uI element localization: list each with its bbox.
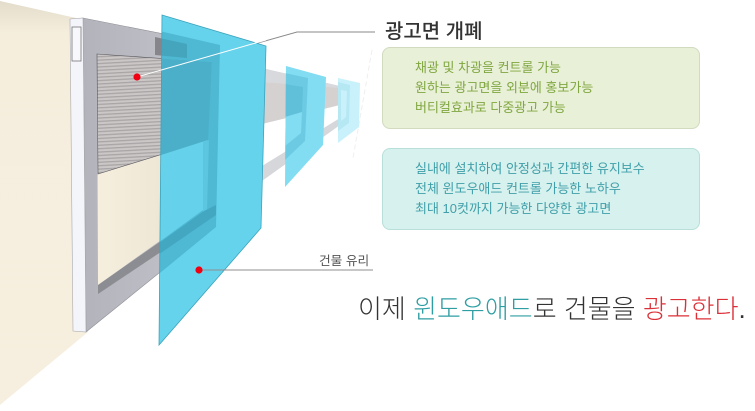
overlaid sill bbox=[160, 205, 216, 253]
leader line: building glass bbox=[199, 269, 373, 271]
text block: teal features: 실내에 설치하여 안정성과 간편한 유지보수 bbox=[415, 161, 645, 176]
label: building glass: 건물 유리 bbox=[319, 254, 369, 268]
leader line: ad surface bbox=[137, 32, 375, 77]
overlaid blind bbox=[161, 58, 212, 155]
text block: green features: 버티컬효과로 다중광고 가능 bbox=[415, 100, 566, 115]
panel: teal features bbox=[382, 148, 700, 230]
text block: teal features: 최대 10컷까지 가능한 다양한 광고면 bbox=[415, 201, 611, 216]
big blue panel bbox=[155, 15, 266, 345]
red dot: ad surface bbox=[133, 73, 141, 81]
text block: green features: 채광 및 차광을 컨트롤 가능 bbox=[415, 60, 561, 75]
illustration: window ad system bbox=[0, 1, 375, 405]
small panel 2 bbox=[285, 66, 326, 187]
small panel 3 bbox=[338, 78, 360, 143]
logo plate bbox=[155, 37, 187, 58]
red dot: building glass bbox=[195, 266, 203, 274]
overlaid opening bbox=[160, 140, 207, 241]
text block: green features bbox=[415, 60, 593, 115]
overlaid logo bbox=[162, 38, 187, 58]
blind bbox=[97, 54, 212, 174]
text block: teal features bbox=[415, 161, 645, 216]
text block: green features: 원하는 광고면을 외분에 홍보가능 bbox=[415, 80, 593, 95]
sill bbox=[98, 205, 216, 294]
heading: ad surface open close: 광고면 개폐 bbox=[385, 21, 483, 43]
dashed faint line bbox=[353, 50, 372, 158]
overlaid inner strip bbox=[203, 140, 209, 212]
window frame front bbox=[83, 18, 220, 332]
window opening bbox=[97, 54, 212, 285]
slogan: 이제 윈도우애드로 건물을 광고한다. bbox=[358, 294, 746, 324]
frame side bbox=[70, 18, 86, 332]
overlaid frame bbox=[155, 30, 220, 277]
distant window strips bbox=[262, 68, 340, 181]
white leader segment on panel bbox=[137, 40, 266, 77]
wall bbox=[0, 1, 88, 405]
side slot bbox=[72, 27, 81, 61]
text block: teal features: 전체 윈도우애드 컨트롤 가능한 노하우 bbox=[415, 181, 621, 196]
panel: green features bbox=[382, 47, 700, 129]
